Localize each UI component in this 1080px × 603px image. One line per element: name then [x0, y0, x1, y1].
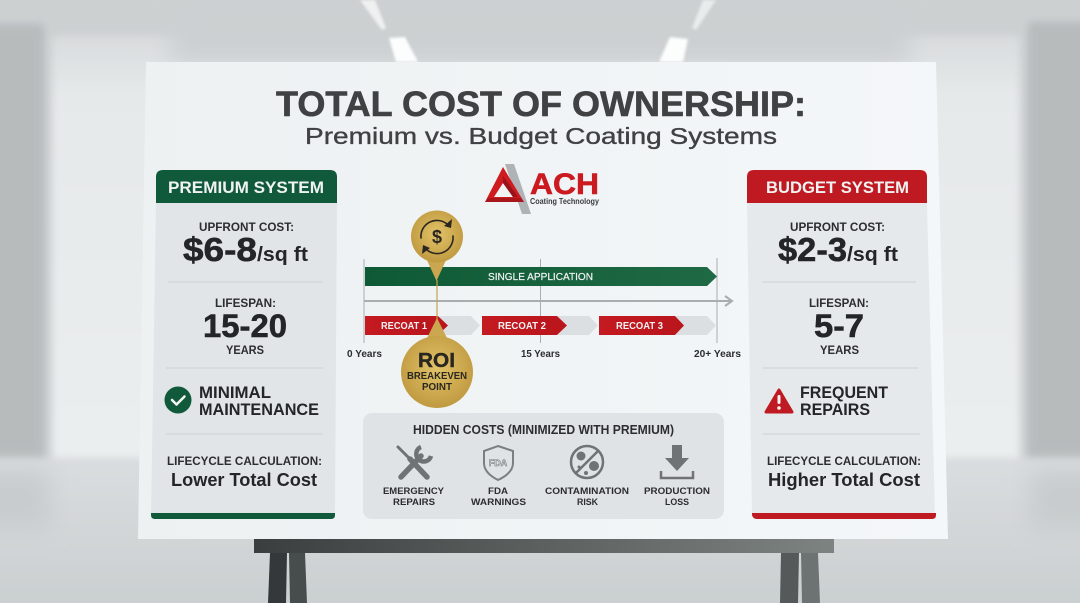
lifecycle label: LIFECYCLE CALCULATION: — [767, 456, 921, 468]
label: contamination risk: CONTAMINATION — [545, 486, 629, 497]
axis label 20+ years: 20+ Years — [694, 348, 741, 360]
lifespan label: LIFESPAN: — [809, 298, 869, 310]
axis ticks — [364, 258, 717, 343]
label: contamination risk — [545, 486, 629, 508]
icon: warning — [766, 390, 792, 412]
hidden costs heading: HIDDEN COSTS (MINIMIZED WITH PREMIUM) — [413, 422, 674, 437]
header label: PREMIUM SYSTEM — [168, 179, 324, 197]
breakeven connector — [436, 280, 438, 320]
title: TOTAL COST OF OWNERSHIP: — [276, 85, 806, 124]
panel body — [747, 203, 935, 516]
panel: budget system — [747, 170, 936, 519]
bottom bar — [151, 513, 335, 519]
panel: hidden costs — [363, 413, 724, 519]
icon: FDA shield — [484, 446, 513, 480]
label: production loss: LOSS — [665, 497, 689, 508]
bar: recoat 3 — [599, 316, 684, 335]
logo: ACH Coating Technology — [485, 164, 599, 214]
recoat 3 label: RECOAT 3 — [616, 320, 663, 332]
label: emergency repairs: REPAIRS — [393, 497, 435, 508]
bar: single application — [365, 267, 717, 286]
label: FDA warnings — [471, 486, 526, 508]
axis label 15 years: 15 Years — [521, 348, 560, 360]
header — [747, 170, 927, 203]
panel body — [151, 203, 337, 516]
label: FDA warnings: WARNINGS — [471, 497, 526, 508]
upfront label: UPFRONT COST: — [199, 222, 294, 234]
subtitle: Premium vs. Budget Coating Systems — [305, 123, 777, 149]
maintenance text: MINIMAL — [199, 384, 271, 402]
price unit: /sq ft — [847, 244, 898, 266]
board — [138, 62, 948, 539]
lifespan value: 5-7 — [814, 308, 864, 344]
logo name: ACH — [530, 168, 599, 201]
bottom bar — [752, 513, 936, 519]
bar: recoat 2 — [482, 316, 567, 335]
ROI breakeven badge — [401, 318, 473, 408]
timeline chart — [347, 258, 741, 360]
maintenance text: MAINTENANCE — [199, 401, 319, 419]
logo tagline: Coating Technology — [530, 196, 599, 206]
icon: check — [164, 386, 192, 414]
repairs text: FREQUENT — [800, 384, 888, 402]
header label: BUDGET SYSTEM — [766, 179, 909, 197]
gray recoat gaps — [440, 316, 716, 335]
point text: POINT — [422, 382, 452, 393]
easel stand — [254, 538, 834, 603]
lifecycle label: LIFECYCLE CALCULATION: — [167, 456, 322, 468]
icon: FDA shield: FDA — [489, 458, 508, 468]
axis arrow — [364, 296, 732, 306]
lifespan unit: YEARS — [820, 345, 859, 357]
price: $2-3 — [778, 231, 847, 268]
bar: recoat 1 — [365, 316, 448, 335]
icon: contamination — [571, 446, 603, 478]
breakeven text: BREAKEVEN — [407, 371, 467, 382]
axis label 0 years: 0 Years — [347, 348, 382, 360]
icon: gold dollar pin — [411, 210, 463, 281]
label: production loss — [644, 486, 710, 508]
panel: premium system — [151, 170, 337, 519]
maintenance text — [199, 384, 319, 419]
lifespan unit: YEARS — [226, 345, 264, 357]
lifespan label: LIFESPAN: — [215, 298, 276, 310]
header — [156, 170, 337, 203]
upfront label: UPFRONT COST: — [790, 222, 885, 234]
bar label: SINGLE APPLICATION — [488, 272, 593, 283]
recoat 2 label: RECOAT 2 — [498, 320, 546, 332]
ROI text: ROI — [418, 350, 455, 372]
price: $6-8 — [183, 231, 257, 268]
icon: gold dollar pin: $ — [432, 227, 442, 247]
icon: wrench — [398, 447, 431, 477]
repairs text: REPAIRS — [800, 401, 870, 419]
label: production loss: PRODUCTION — [644, 486, 710, 497]
label: emergency repairs — [383, 486, 445, 508]
lifespan value: 15-20 — [203, 308, 287, 344]
label: FDA warnings: FDA — [488, 486, 508, 497]
price unit: /sq ft — [257, 244, 308, 266]
label: emergency repairs: EMERGENCY — [383, 486, 445, 497]
label: contamination risk: RISK — [577, 497, 598, 508]
lifecycle result: Higher Total Cost — [768, 470, 920, 490]
lifecycle result: Lower Total Cost — [171, 470, 317, 490]
logo mark — [485, 164, 531, 214]
icon: download — [661, 445, 693, 478]
repairs text — [800, 384, 888, 419]
recoat 1 label: RECOAT 1 — [381, 320, 427, 332]
